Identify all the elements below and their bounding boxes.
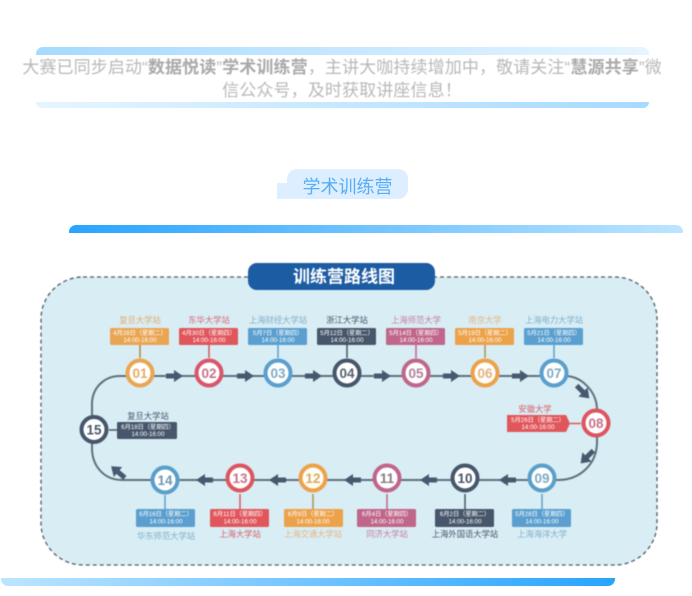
station 15: 复旦大学站	[127, 411, 169, 421]
decorative bar: panel top	[69, 225, 683, 233]
station 03: 14:00-16:00	[261, 337, 295, 344]
station 14: 14:00-16:00	[149, 518, 183, 526]
station 11: 14:00-16:00	[370, 518, 404, 526]
station 01: 01	[132, 366, 148, 381]
station 07: 上海电力大学站	[525, 315, 583, 325]
station 09: 14:00-16:00	[525, 518, 559, 526]
heading tag: 学术训练营	[277, 169, 408, 199]
station 11: 11	[380, 471, 395, 486]
decorative bar: intro bottom	[36, 102, 649, 108]
station 14	[136, 468, 195, 541]
station 13	[210, 466, 269, 539]
panel: route map background	[41, 277, 657, 565]
station 11: 6月4日（星期四）	[362, 510, 412, 518]
station 10: 上海外国语大学站	[432, 529, 498, 539]
station 05: 5月14日（星期四）	[389, 329, 443, 337]
station 06: 南京大学	[468, 315, 502, 325]
station 05: 上海师范大学	[391, 315, 441, 325]
station 04: 5月12日（星期二）	[320, 329, 374, 337]
station 08: 安徽大学	[518, 404, 552, 414]
station 14: 6月16日（星期二）	[139, 510, 193, 518]
station 15: 6月18日（星期四）	[121, 423, 175, 431]
station 09	[512, 466, 571, 539]
station 04	[317, 315, 376, 386]
station 15	[82, 411, 177, 442]
station 03	[248, 315, 307, 386]
station 03: 03	[270, 366, 286, 381]
text block: intro announcement: 大赛已同步启动“数据悦读”学术训练营，主讲大咖持续增加中，敬请关注“慧源共享”微信公众号，及时获取讲座信息！	[22, 58, 662, 100]
station 07	[524, 315, 583, 386]
station 01: 4月28日（星期二）	[113, 329, 167, 337]
station 10: 10	[457, 471, 473, 486]
station 07: 07	[546, 366, 562, 381]
station 13: 13	[232, 471, 248, 486]
station 09: 上海海洋大学	[517, 529, 567, 539]
station 02	[179, 315, 238, 386]
station 13: 上海大学站	[219, 529, 261, 539]
station 12: 上海交通大学站	[284, 529, 342, 539]
station 03: 5月7日（星期四）	[253, 329, 303, 337]
title: route map	[248, 263, 435, 290]
station 14: 华东师范大学站	[137, 531, 195, 541]
station 04: 14:00-16:00	[330, 337, 364, 344]
station 15: 14:00-16:00	[131, 431, 165, 438]
decorative bar: intro top	[36, 47, 649, 55]
station 15: 15	[86, 422, 102, 438]
arrow: 14 to 15	[107, 461, 129, 483]
station 08	[507, 404, 608, 436]
heading tag: 学术训练营: 学术训练营	[302, 177, 392, 197]
station 06: 14:00-16:00	[468, 337, 502, 344]
station 04: 浙江大学站	[326, 315, 368, 325]
station 09: 5月28日（星期四）	[515, 510, 569, 518]
station 07: 14:00-16:00	[537, 337, 571, 344]
station 02: 14:00-16:00	[192, 337, 226, 344]
station 14: 14	[157, 473, 173, 488]
station 08: 5月26日（星期二）	[511, 416, 565, 424]
station 08: 14:00-16:00	[521, 424, 555, 431]
station 06	[455, 315, 514, 386]
station 01: 复旦大学站	[119, 315, 161, 325]
decorative bar: panel bottom	[1, 578, 615, 586]
station 12: 12	[305, 471, 321, 486]
title: route map: 训练营路线图	[293, 266, 395, 286]
station 09: 09	[534, 471, 550, 486]
station 13: 6月11日（星期四）	[213, 510, 267, 518]
station 10: 14:00-16:00	[448, 518, 482, 526]
station 06: 5月19日（星期二）	[458, 329, 512, 337]
station 03: 上海财经大学站	[249, 315, 307, 325]
station 05: 14:00-16:00	[399, 337, 433, 344]
station 02: 02	[201, 366, 217, 381]
station 06: 06	[477, 366, 493, 381]
arrow: 07 to 08	[572, 381, 594, 403]
track: route line	[92, 376, 597, 480]
station 12: 14:00-16:00	[296, 518, 330, 526]
station 02: 东华大学站	[188, 315, 230, 325]
station 05	[386, 315, 445, 386]
station 04: 04	[339, 366, 355, 381]
station 12	[284, 466, 343, 539]
station 02: 4月30日（星期四）	[182, 329, 236, 337]
arrows: bottom row	[196, 474, 516, 486]
station 11	[357, 466, 416, 539]
station 01	[110, 315, 169, 386]
station 10	[432, 466, 498, 539]
station 01: 14:00-16:00	[123, 337, 157, 344]
station 07: 5月21日（星期四）	[527, 329, 581, 337]
station 11: 同济大学站	[366, 529, 408, 539]
arrow: 08 to 09	[576, 446, 598, 468]
arrows: top row	[166, 370, 529, 382]
station 10: 6月2日（星期二）	[440, 510, 490, 518]
station 12: 6月9日（星期二）	[288, 510, 338, 518]
station 05: 05	[408, 366, 424, 381]
station 13: 14:00-16:00	[223, 518, 257, 526]
station 08: 08	[588, 416, 604, 431]
